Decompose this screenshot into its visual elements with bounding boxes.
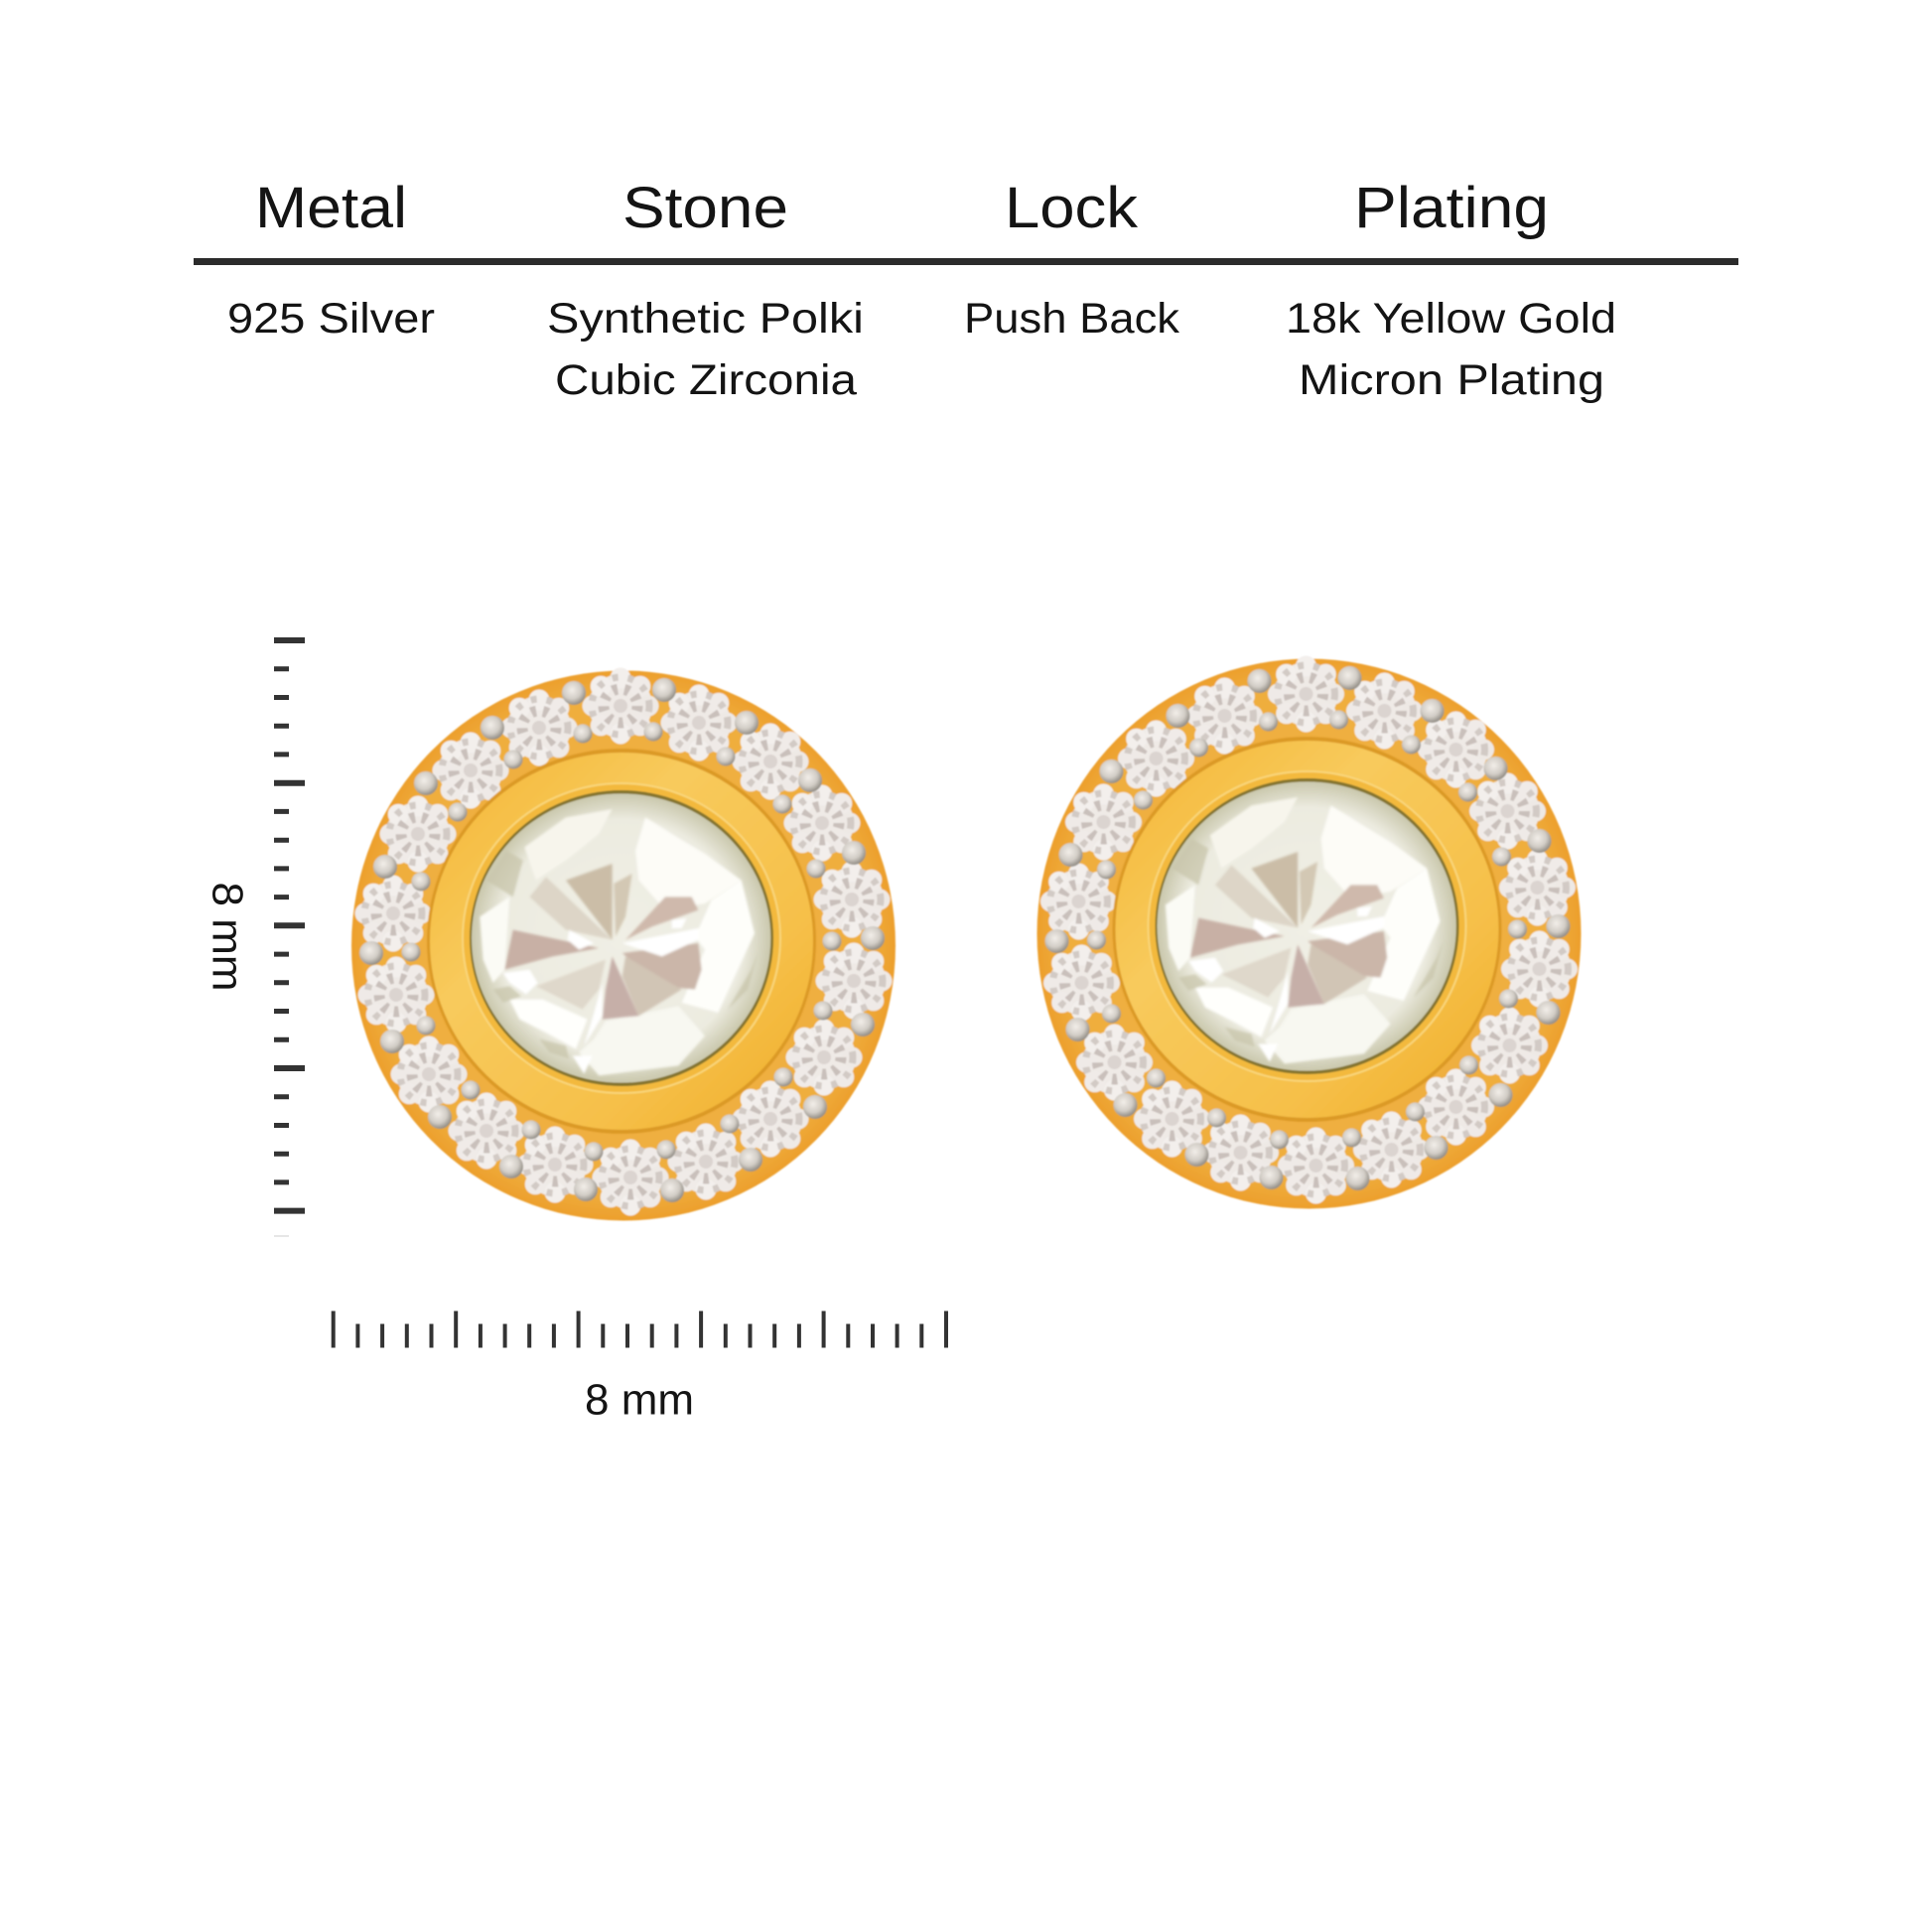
value: Synthetic Polki / Cubic Zirconia: Cubic Zirconia: [555, 356, 857, 404]
olive edge shade: [486, 851, 758, 1059]
gold base disc: [351, 671, 896, 1221]
horizontal dimension label: 8 mm: [585, 1376, 694, 1424]
value: 18k Yellow Gold Micron Plating: 18k Yellow Gold: [1286, 295, 1616, 343]
white facets: [480, 809, 755, 1075]
value: 18k Yellow Gold Micron Plating: [1286, 295, 1616, 404]
vertical dimension label: 8 mm: [203, 882, 252, 991]
spec column: Stone: [547, 176, 864, 404]
heading: Stone: Stone: [622, 176, 788, 240]
spec column: Plating: [1286, 176, 1616, 404]
heading: Lock: Lock: [1005, 176, 1139, 240]
central polki stone: [472, 793, 770, 1083]
value: Synthetic Polki / Cubic Zirconia: Synthetic Polki: [547, 295, 864, 343]
value: 925 Silver: 925 Silver: [227, 295, 435, 343]
value: Push Back: Push Back: [964, 295, 1180, 343]
vertical ruler: [274, 640, 305, 1236]
header rule: [194, 258, 1738, 265]
taupe star facets: [504, 864, 702, 1020]
stone dark edge: [470, 790, 773, 1086]
bezel shadow: [427, 749, 816, 1134]
inner prongs: [401, 723, 842, 1162]
value: 18k Yellow Gold Micron Plating: Micron Plating: [1299, 356, 1604, 404]
value: Synthetic Polki / Cubic Zirconia: [547, 295, 864, 404]
heading: Metal: Metal: [255, 176, 407, 240]
outer prongs: [359, 678, 885, 1202]
bezel inner rim: [463, 783, 780, 1093]
bright highlights: [503, 918, 698, 1074]
melee stone halo: [355, 667, 892, 1215]
gold bezel: [430, 753, 813, 1130]
left earring: [351, 667, 896, 1221]
spec column: Metal: [227, 176, 435, 343]
horizontal ruler: [334, 1311, 946, 1348]
heading: Plating: Plating: [1354, 176, 1549, 240]
spec column: Lock: [964, 176, 1180, 343]
right earring: [1036, 655, 1581, 1209]
